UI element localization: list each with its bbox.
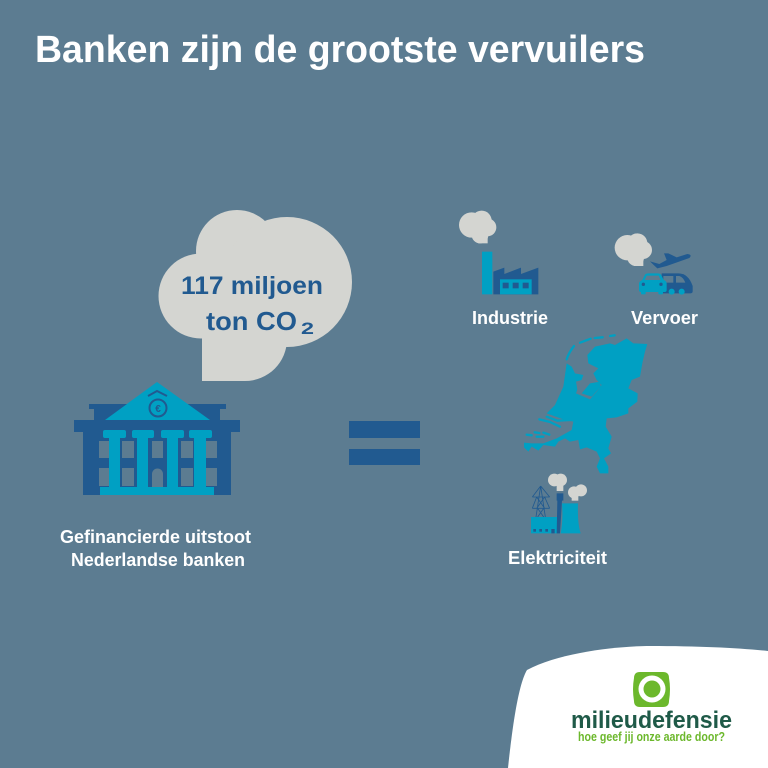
label: Vervoer: Vervoer (631, 308, 698, 328)
figure: 117 miljoen: 117 miljoen (181, 272, 323, 300)
label: Industrie: Industrie (472, 308, 548, 328)
icon: transport with smoke, plane, train and car (615, 233, 693, 295)
map: the Netherlands (524, 335, 647, 473)
logo mark (633, 672, 670, 707)
title: Banken zijn de grootste vervuilers (35, 29, 645, 71)
subscript 2: 2 (301, 319, 314, 338)
icon: power plant with pylon and smoke (531, 474, 587, 533)
logo wordmark: milieudefensie (571, 707, 732, 734)
icon: factory with smoke (459, 211, 538, 294)
bank caption: Gefinancierde uitstoot (60, 527, 251, 547)
icon: bank building (74, 382, 240, 495)
cloud shape (158, 210, 352, 381)
bank caption (60, 527, 251, 570)
speech cloud with emissions figure (158, 210, 352, 381)
icon: bank building: € (155, 404, 161, 415)
label: Elektriciteit: Elektriciteit (508, 548, 607, 568)
figure: ton CO2: ton CO (206, 306, 297, 336)
equals sign (349, 421, 420, 465)
logo tagline: hoe geef jij onze aarde door? (578, 729, 725, 744)
logo panel: milieudefensie (508, 646, 768, 768)
bank caption: Nederlandse banken (71, 550, 245, 570)
